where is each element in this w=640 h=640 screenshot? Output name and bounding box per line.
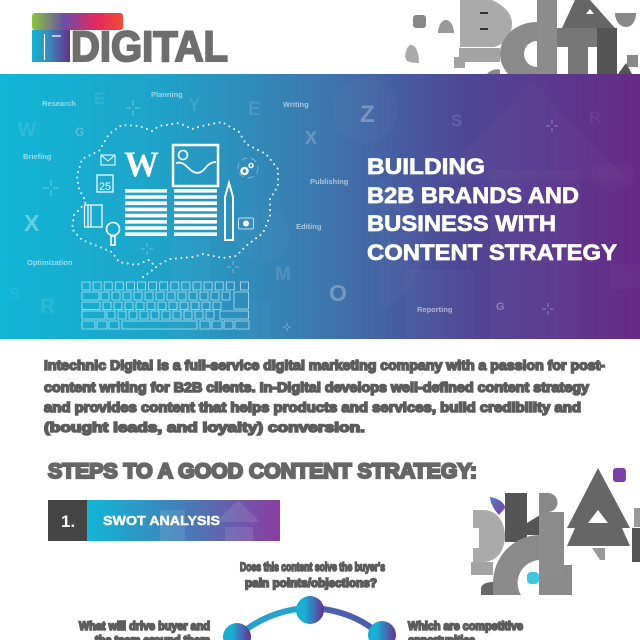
step title: SWOT ANALYSIS xyxy=(103,513,220,528)
step 1 bar xyxy=(48,500,280,541)
floating letters: R xyxy=(589,108,601,127)
hero title: B2B BRANDS AND xyxy=(367,183,579,208)
icon: calendar xyxy=(97,175,113,193)
icon: magnifier xyxy=(106,222,120,245)
floating letters: S xyxy=(9,286,20,303)
decorative letter shapes right xyxy=(471,468,640,595)
process labels: Planning xyxy=(151,90,183,99)
swot question top xyxy=(240,562,385,590)
floating letters: G xyxy=(75,125,84,139)
process labels: Publishing xyxy=(310,177,349,186)
floating letters: E xyxy=(94,89,105,108)
process labels: Optimization xyxy=(27,258,73,267)
process labels: Reporting xyxy=(417,305,453,314)
section heading: STEPS TO A GOOD CONTENT STRATEGY: xyxy=(48,460,477,483)
hero title: BUSINESS WITH xyxy=(367,211,556,236)
icon: gears xyxy=(238,158,258,178)
node left xyxy=(223,623,251,640)
icon: notebook xyxy=(84,205,102,227)
floating letters: Y xyxy=(188,95,201,116)
icon: picture frame xyxy=(173,145,218,186)
node top xyxy=(296,596,324,624)
icon: calendar: 25 xyxy=(99,181,111,193)
icon: camera xyxy=(238,218,254,229)
floating letters: O xyxy=(329,280,347,306)
process labels: Writing xyxy=(283,100,309,109)
ghost shapes in bar xyxy=(160,500,260,541)
icon: mail xyxy=(101,155,115,165)
step number: 1. xyxy=(61,512,75,531)
floating letters: R xyxy=(40,295,55,318)
process labels: Briefing xyxy=(23,152,52,161)
icon: W letter: W xyxy=(124,144,159,184)
floating letters: Z xyxy=(360,101,375,128)
hero title xyxy=(367,154,617,265)
intro paragraph: (bought leads, and loyalty) conversion. xyxy=(44,419,365,435)
floating letters: X xyxy=(24,210,40,236)
keyboard xyxy=(82,282,249,329)
swot question right xyxy=(408,621,523,640)
thought cloud dotted outline xyxy=(72,122,278,277)
swot question top: pain points/objections? xyxy=(245,578,377,590)
hero banner xyxy=(0,74,640,339)
swot question right: Which are competitive xyxy=(408,621,523,633)
node right xyxy=(368,621,396,640)
floating letters: G xyxy=(496,301,505,313)
floating letters xyxy=(9,89,601,318)
hero title: CONTENT STRATEGY xyxy=(367,240,617,265)
floating letters: M xyxy=(275,264,291,285)
swot arc diagram xyxy=(223,596,396,640)
text columns xyxy=(125,189,217,236)
logo xyxy=(32,13,228,71)
floating letters: S xyxy=(451,111,462,130)
swot question top: Does this content solve the buyer's xyxy=(240,562,385,574)
swot question left: What will drive buyer and xyxy=(79,621,210,633)
intro paragraph: content writing for B2B clients. In-Digital develops well-defined content strategy xyxy=(44,379,589,395)
swot question left xyxy=(79,621,210,640)
process labels: Editing xyxy=(296,222,322,231)
floating letters: E xyxy=(248,99,261,120)
floating letters: X xyxy=(305,128,317,148)
decorative letter shapes top right xyxy=(405,0,638,86)
intro paragraph: Intechnic Digital is a full-service digital marketing company with a passion for post- xyxy=(44,357,605,373)
hero ghost shapes xyxy=(170,77,640,339)
logo: DIGITAL xyxy=(71,23,228,71)
icon: pencil xyxy=(225,183,233,240)
floating letters: W xyxy=(18,120,36,141)
plus signs xyxy=(43,100,558,331)
intro paragraph xyxy=(44,357,605,435)
process labels xyxy=(23,90,453,314)
process labels: Research xyxy=(42,99,76,108)
hero title: BUILDING xyxy=(367,154,485,179)
intro paragraph: and provides content that helps products and services, build credibility and xyxy=(44,399,581,415)
